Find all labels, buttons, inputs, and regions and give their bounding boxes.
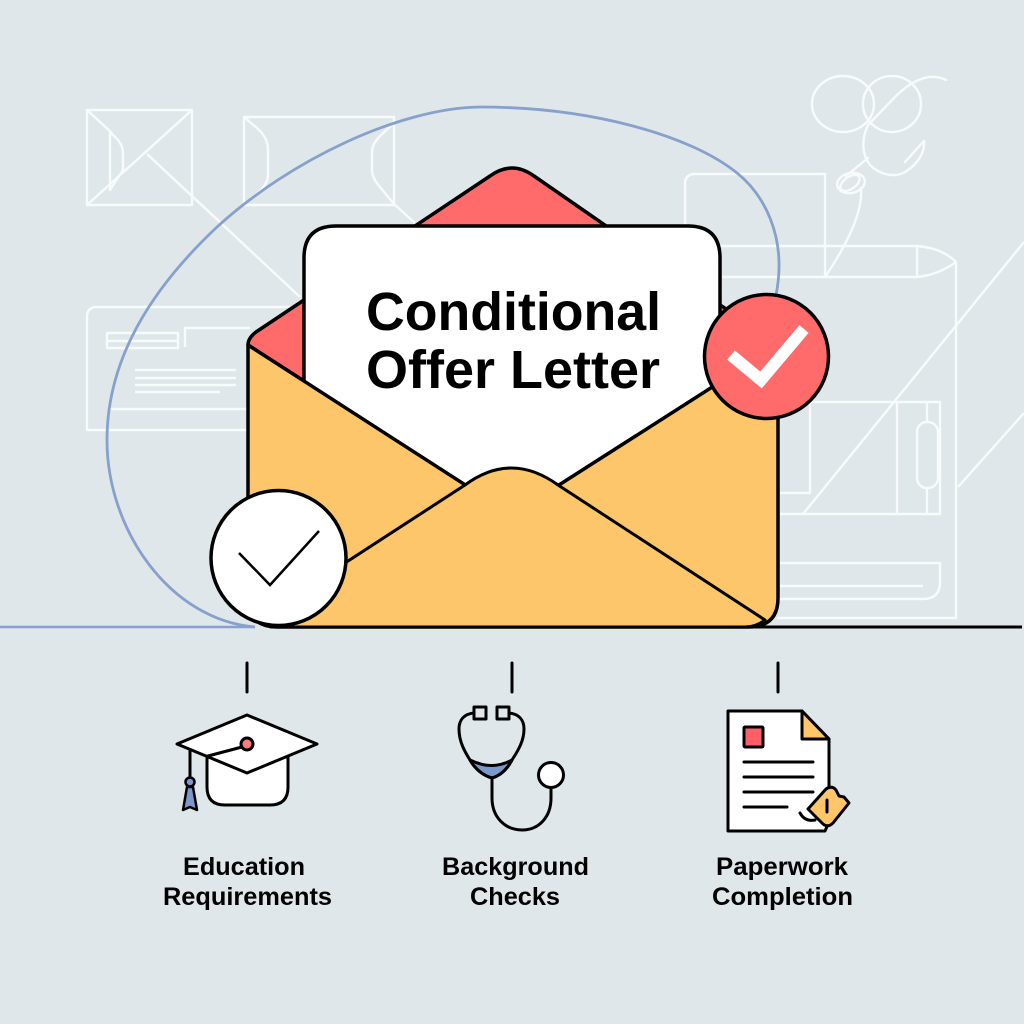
letter title: Conditional [366,282,661,342]
red check badge [704,294,828,418]
letter sheet [304,226,720,522]
background line art [87,76,1024,618]
ground line [0,626,1022,628]
white check badge [211,490,346,626]
background envelope sketch one [87,110,300,297]
background signature flourish [812,76,946,277]
blue orbit curve [107,107,779,627]
letter title [366,282,661,400]
letter title: Offer Letter [366,340,660,400]
envelope front flap [285,468,765,627]
label: education requirements [163,853,332,911]
icon: stethoscope [459,707,564,830]
label: background checks: Checks [470,883,560,911]
label: paperwork completion: Completion [712,883,853,911]
label: paperwork completion: Paperwork [716,853,848,881]
envelope with letter [248,168,778,627]
label: background checks [442,853,589,911]
envelope red back flap [248,168,778,515]
icon: graduation cap [177,715,317,810]
label: paperwork completion [712,853,853,911]
label: education requirements: Requirements [163,883,332,911]
envelope pocket [248,345,778,627]
label: education requirements: Education [183,853,305,881]
icon: paperwork document [728,711,849,831]
label: background checks: Background [442,853,589,881]
background form card sketch [87,307,290,430]
connector ticks [247,663,778,692]
background scroll sketch [685,174,956,618]
background panel sketch [780,242,1024,599]
background envelope sketch two [244,117,415,223]
